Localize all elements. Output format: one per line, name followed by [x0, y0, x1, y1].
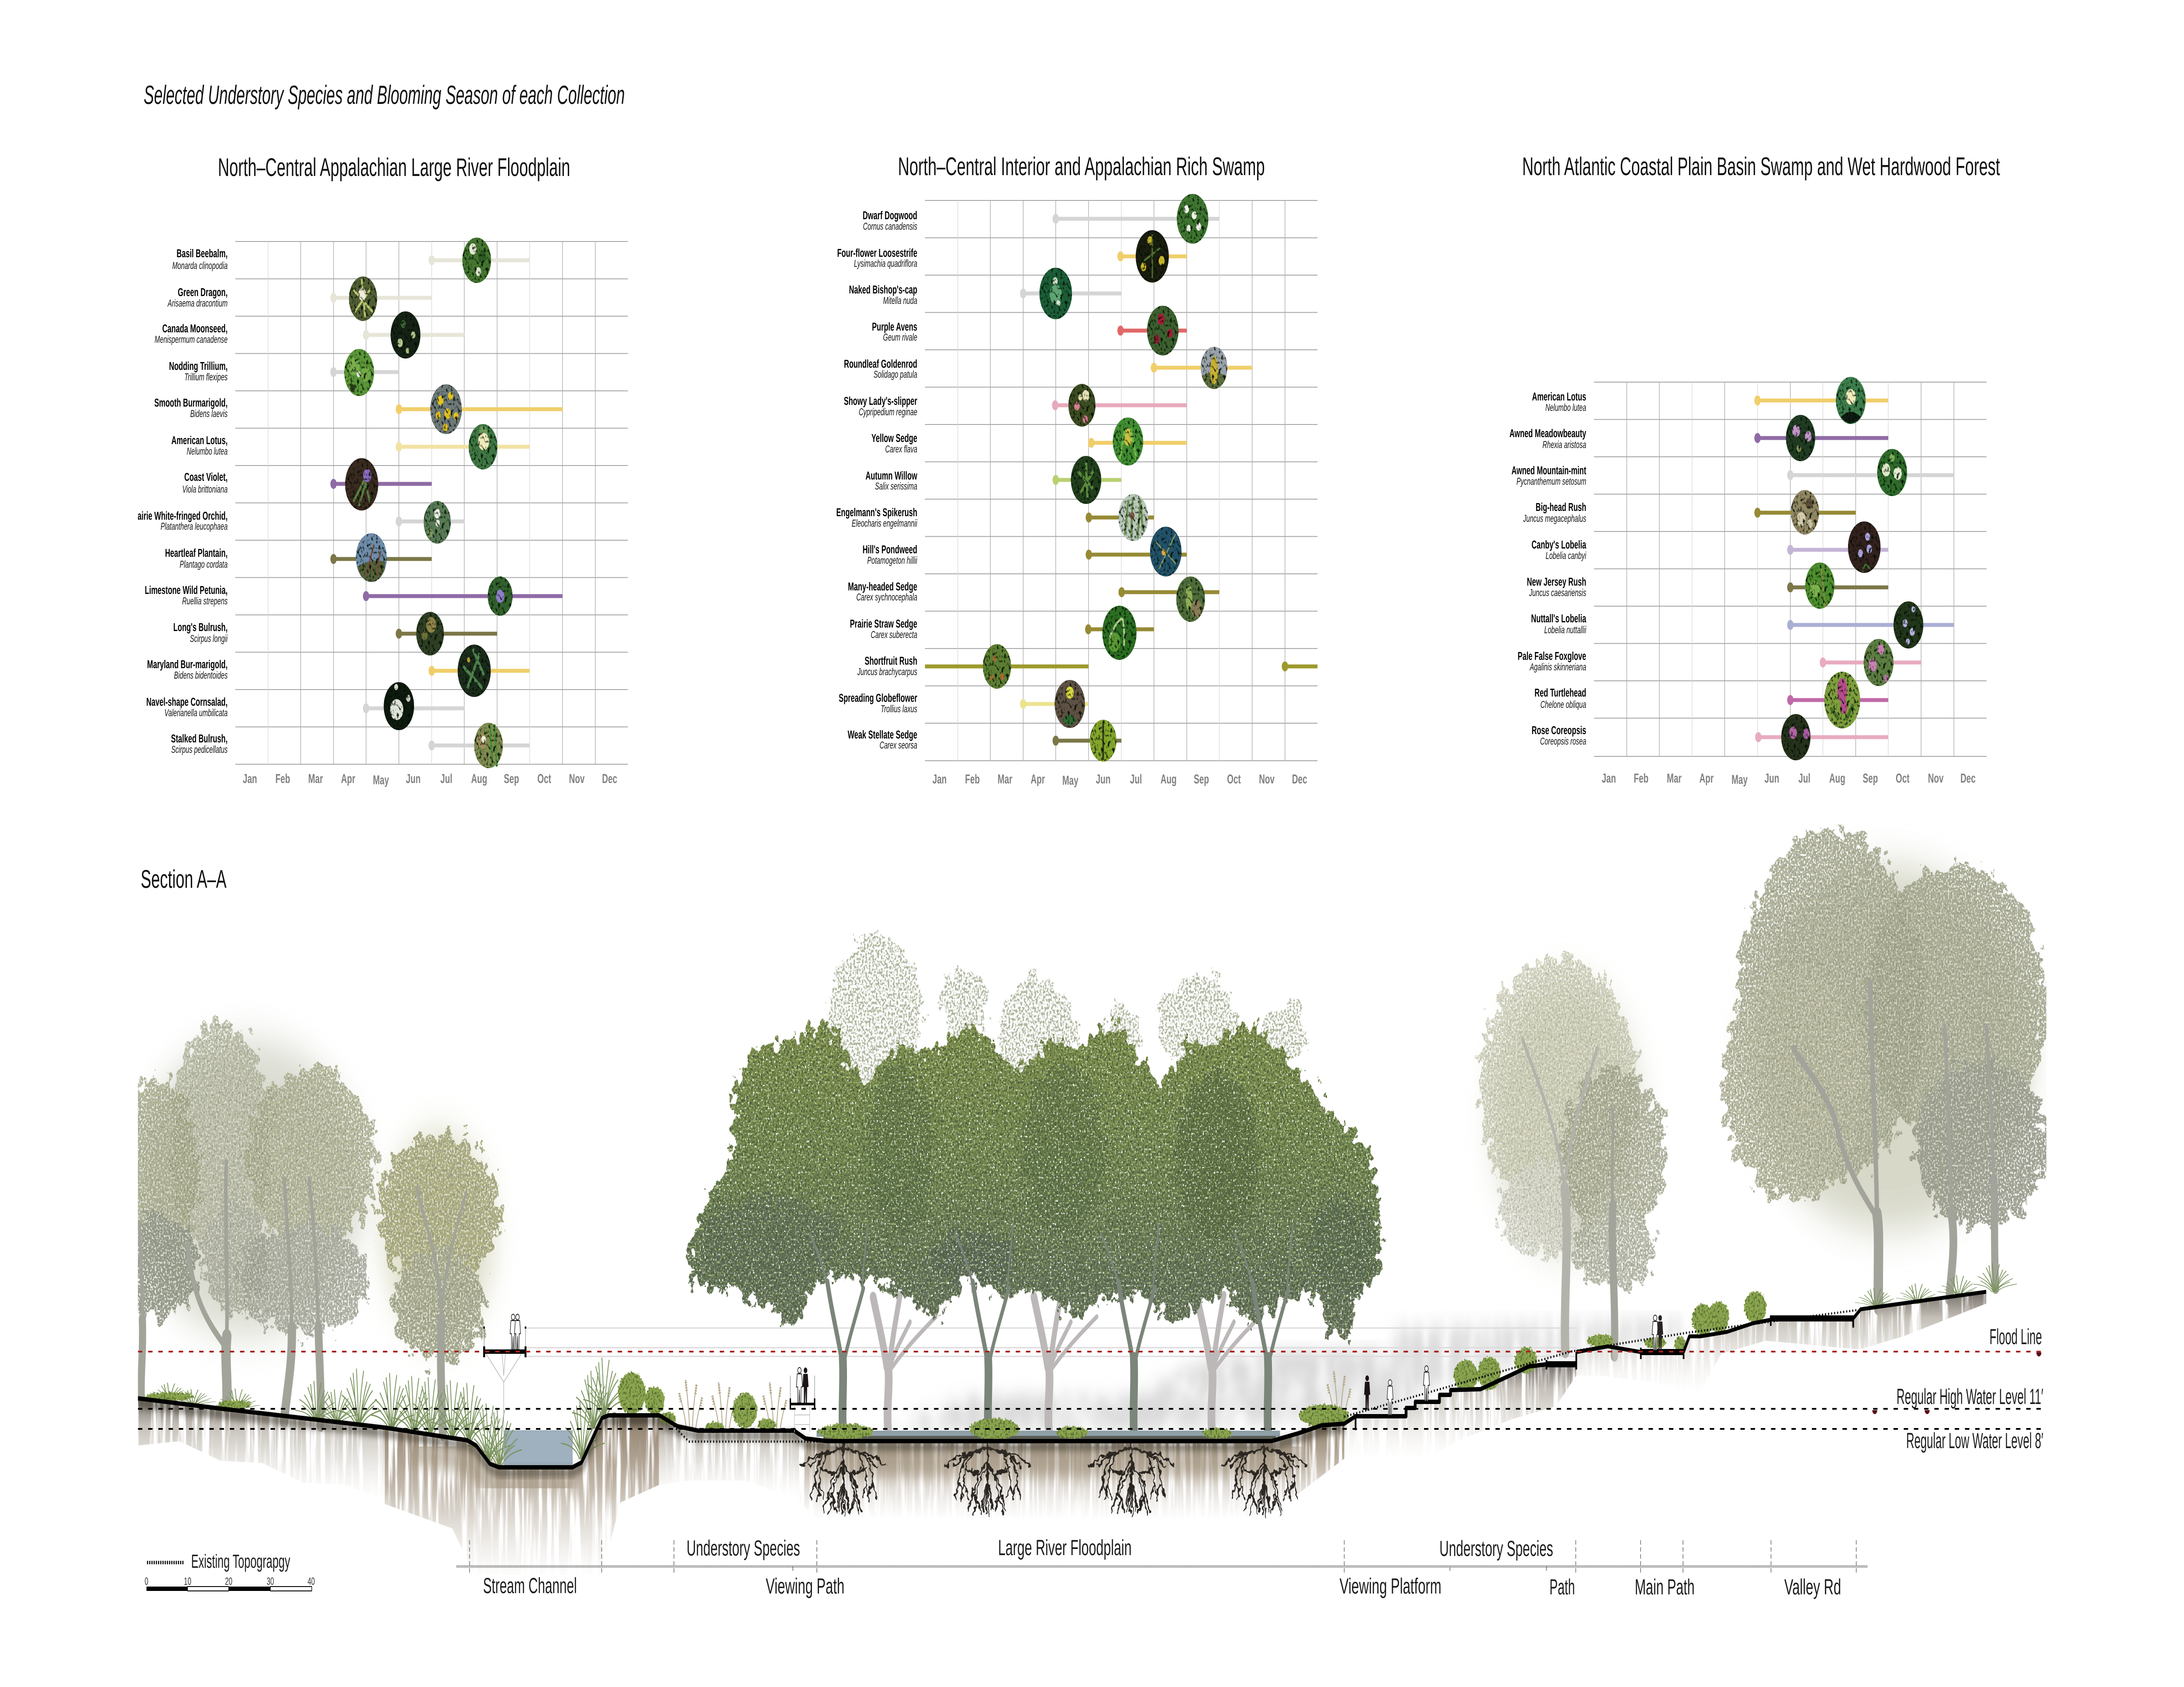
row: Purple Avens: Purple Avens: [872, 320, 917, 333]
row: Big-head Rush: Big-head Rush: [1536, 500, 1586, 514]
trees: soft fog mass behind groves: [132, 865, 2033, 1341]
flood line: [138, 1351, 2043, 1352]
month axis: Mar: [308, 772, 323, 786]
month axis: Mar: [998, 772, 1013, 787]
month axis: Aug: [1161, 772, 1177, 787]
month axis: Nov: [569, 772, 584, 786]
zone labels: Stream Channel: [483, 1573, 577, 1598]
row: Navel-shape Cornsalad: Valerianella umbilicata: [164, 708, 228, 719]
row: Showy Lady's-slipper: Showy Lady's-slipper: [844, 394, 917, 407]
shrubs: [145, 1291, 1766, 1439]
scale bar: 10: [184, 1576, 191, 1587]
water level labels: Regular Low Water Level 8′: [1906, 1428, 2043, 1453]
row: Four-flower Loosestrife: [837, 230, 1187, 283]
row: New Jersey Rush: Juncus caesariensis: [1529, 588, 1586, 599]
month axis: Oct: [1896, 771, 1910, 786]
row: Nuttall's Lobelia: [1531, 601, 1954, 649]
month axis: Aug: [1829, 771, 1845, 786]
month axis: Feb: [965, 772, 980, 787]
row: Weak Stellate Sedge: Weak Stellate Sedge: [848, 728, 917, 741]
row: Green Dragon: Green Dragon,: [178, 286, 228, 299]
trees: ghost background canopy: [828, 936, 1305, 1102]
month axis: May: [1731, 773, 1748, 787]
month axis: Apr: [1031, 772, 1045, 787]
row: American Lotus: Nelumbo lutea: [1545, 403, 1586, 414]
month axis: Jul: [1798, 771, 1811, 786]
month axis: Feb: [1634, 771, 1648, 786]
row: Limestone Wild Petunia: Ruellia strepens: [182, 596, 228, 607]
month axis: Dec: [1960, 771, 1976, 786]
row: American Lotus: American Lotus,: [171, 434, 228, 447]
row: Stalked Bulrush: [171, 723, 530, 768]
month axis: [243, 772, 617, 787]
row: Dwarf Dogwood: [863, 194, 1219, 244]
month axis: Dec: [602, 772, 617, 786]
zone labels: Viewing Platform: [1340, 1574, 1441, 1598]
main heading: Selected Understory Species and Blooming Season of each Collection: [144, 80, 625, 110]
row: Dwarf Dogwood: Dwarf Dogwood: [863, 209, 917, 222]
row: Hill's Pondweed: [863, 527, 1187, 576]
row: Autumn Willow: Autumn Willow: [866, 469, 917, 482]
row: Prairie Straw Sedge: [850, 606, 1154, 660]
row: Nodding Trillium: [169, 349, 399, 396]
row: Heartleaf Plantain: Plantago cordata: [180, 559, 228, 570]
row: Basil Beebalm: [172, 238, 530, 283]
row: Awned Meadowbeauty: Awned Meadowbeauty: [1510, 427, 1586, 440]
month axis: Jul: [1130, 772, 1142, 787]
soil: continuous top band below the floodplain and channel: [414, 1450, 1302, 1485]
month axis: [933, 772, 1307, 788]
row: Maryland Bur-marigold: Maryland Bur-marigold,: [147, 658, 228, 671]
panel: North-Central Interior and Appalachian Rich Swamp: [836, 153, 1317, 788]
month axis: Sep: [504, 772, 519, 786]
row: Nuttall's Lobelia: Lobelia nuttallii: [1544, 625, 1586, 636]
month axis: Oct: [537, 772, 551, 786]
month axis: Jan: [243, 772, 257, 786]
trees: foggy right-hand groves: [1480, 830, 2047, 1356]
row: Prairie Straw Sedge: Prairie Straw Sedge: [850, 617, 917, 630]
row: Prairie Straw Sedge: Carex suberecta: [871, 630, 917, 641]
row: Stalked Bulrush: Stalked Bulrush,: [171, 732, 228, 745]
row: Hill's Pondweed: Hill's Pondweed: [863, 543, 917, 556]
row: Spreading Globeflower: Spreading Globeflower: [839, 691, 917, 704]
row: Red Turtlehead: Chelone obliqua: [1541, 700, 1586, 711]
regular high water line: [138, 1408, 2043, 1410]
row: American Lotus: [1532, 377, 1888, 424]
row: Prairie White-fringed Orchid: Prairie White-fringed Orchid,: [130, 509, 228, 522]
tree roots: [801, 1443, 1307, 1517]
month axis: Jun: [1765, 771, 1779, 786]
water level labels: [1897, 1325, 2043, 1453]
row: Rose Coreopsis: Coreopsis rosea: [1540, 736, 1586, 747]
month axis: Aug: [471, 772, 487, 786]
month axis: Jun: [1096, 772, 1110, 787]
month axis: Sep: [1194, 772, 1209, 787]
row: Green Dragon: Arisaema dracontium: [167, 298, 228, 309]
row: Canby's Lobelia: Lobelia canbyi: [1546, 551, 1586, 562]
row: Coast Violet: [182, 458, 432, 511]
row: American Lotus: Nelumbo lutea: [187, 446, 228, 457]
row: Rose Coreopsis: Rose Coreopsis: [1531, 724, 1586, 737]
water: floodplain pool: [816, 1431, 1280, 1441]
water: stream channel: [504, 1430, 573, 1467]
month axis: Nov: [1259, 772, 1275, 787]
zone labels: Path: [1549, 1575, 1575, 1599]
month axis: Jul: [440, 772, 453, 786]
row: Showy Lady's-slipper: [844, 384, 1187, 427]
row: Showy Lady's-slipper: Cypripedium reginae: [859, 407, 917, 418]
row: Roundleaf Goldenrod: Solidago patula: [874, 369, 917, 380]
row: Coast Violet: Coast Violet,: [184, 470, 228, 483]
zone labels: Understory Species: [1439, 1536, 1553, 1561]
row: American Lotus: [171, 424, 530, 469]
row: Four-flower Loosestrife: Lysimachia quadriflora: [854, 259, 917, 269]
row: Red Turtlehead: [1534, 672, 1888, 728]
month axis: [1602, 771, 1976, 787]
section heading: Section A–A: [141, 866, 227, 894]
row: Canada Moonseed: Canada Moonseed,: [162, 322, 228, 335]
row: New Jersey Rush: [1527, 562, 1888, 609]
row: Prairie White-fringed Orchid: [130, 501, 464, 544]
section drawing A-A: [111, 830, 2047, 1575]
row: Canada Moonseed: Menispermum canadense: [155, 335, 228, 345]
scale bar: [145, 1576, 315, 1591]
water level labels: Regular High Water Level 11′: [1897, 1384, 2043, 1409]
zone labels: [483, 1535, 1841, 1599]
scale bar: 30: [266, 1576, 274, 1587]
month axis: Nov: [1928, 771, 1944, 786]
row: Basil Beebalm: Basil Beebalm,: [176, 247, 228, 260]
row: American Lotus: American Lotus: [1532, 390, 1586, 403]
regular low water line: [138, 1428, 2043, 1430]
bridge over stream channel: [483, 1326, 526, 1465]
zone labels: Valley Rd: [1784, 1575, 1841, 1599]
chart heading: North Atlantic Coastal Plain Basin Swamp and Wet Hardwood Forest: [1522, 153, 2000, 181]
row: Awned Mountain-mint: Pycnanthemum setosum: [1517, 476, 1586, 487]
row: Many-headed Sedge: [848, 576, 1219, 622]
month axis: Dec: [1292, 772, 1307, 787]
chart heading: North–Central Interior and Appalachian Rich Swamp: [898, 153, 1265, 181]
row: Maryland Bur-marigold: [147, 645, 530, 697]
row: Navel-shape Cornsalad: Navel-shape Cornsalad,: [146, 695, 228, 708]
row: New Jersey Rush: New Jersey Rush: [1527, 575, 1586, 588]
soil profile: [138, 1293, 1986, 1575]
grass along slope and stream banks: [149, 1263, 2017, 1465]
row: Smooth Burmarigold: [154, 384, 563, 434]
row: Nodding Trillium: Nodding Trillium,: [169, 359, 228, 373]
row: Purple Avens: Geum rivale: [883, 332, 917, 343]
row: Heartleaf Plantain: Heartleaf Plantain,: [165, 546, 228, 559]
row: Weak Stellate Sedge: [848, 720, 1121, 762]
row: Yellow Sedge: [871, 417, 1187, 466]
row: Yellow Sedge: Carex flava: [885, 444, 917, 455]
month axis: May: [373, 773, 389, 787]
scale bar: 20: [225, 1576, 232, 1587]
row: Naked Bishop's-cap: Mitella nuda: [883, 296, 917, 307]
row: Autumn Willow: Salix serissima: [875, 481, 917, 492]
month axis: Apr: [341, 772, 356, 786]
row: Autumn Willow: [866, 456, 1121, 504]
row: Heartleaf Plantain: [165, 533, 432, 582]
trees: main floodplain canopy: [690, 1022, 1382, 1344]
row: Dwarf Dogwood: Cornus canadensis: [863, 221, 917, 232]
month axis: Oct: [1227, 772, 1241, 787]
month axis: Jan: [933, 772, 947, 787]
panel: North-Central Appalachian Large River Floodplain: [130, 154, 628, 787]
row: Prairie White-fringed Orchid: Platanthera leucophaea: [161, 521, 228, 532]
row: Spreading Globeflower: Trollius laxus: [881, 704, 917, 715]
row: Nodding Trillium: Trillium flexipes: [184, 372, 228, 383]
row: Many-headed Sedge: Many-headed Sedge: [848, 580, 917, 593]
month axis: Jan: [1602, 771, 1616, 786]
row: Roundleaf Goldenrod: Roundleaf Goldenrod: [844, 357, 917, 370]
people: [510, 1314, 1663, 1415]
row: Naked Bishop's-cap: [849, 268, 1121, 319]
row: Big-head Rush: Juncus megacephalus: [1523, 514, 1586, 524]
existing topography dotted line: [666, 1310, 1857, 1442]
row: Awned Meadowbeauty: [1510, 415, 1888, 461]
row: Long's Bulrush: Scirpus longii: [190, 634, 228, 645]
row: Awned Mountain-mint: [1511, 449, 1954, 496]
zone labels: Main Path: [1635, 1575, 1695, 1599]
row: Shortfruit Rush: Shortfruit Rush: [865, 654, 917, 667]
row: Engelmann's Spikerush: Eleocharis engelmannii: [852, 518, 917, 529]
row: Navel-shape Cornsalad: [146, 682, 464, 730]
row: Pale False Foxglove: Pale False Foxglove: [1518, 649, 1586, 662]
row: Engelmann's Spikerush: Engelmann's Spikerush: [836, 506, 917, 519]
row: Long's Bulrush: [173, 612, 497, 655]
month axis: Jun: [406, 772, 421, 786]
row: Canada Moonseed: [155, 311, 464, 359]
row: Big-head Rush: [1523, 490, 1856, 535]
row: Roundleaf Goldenrod: [844, 347, 1252, 389]
row: Coast Violet: Viola brittoniana: [182, 484, 228, 495]
month axis: Apr: [1699, 771, 1714, 786]
row: Naked Bishop's-cap: Naked Bishop's-cap: [849, 283, 917, 296]
row: Awned Mountain-mint: Awned Mountain-mint: [1511, 464, 1586, 477]
row: Limestone Wild Petunia: [145, 576, 563, 616]
month axis: May: [1062, 773, 1078, 788]
row: Spreading Globeflower: [839, 680, 1089, 728]
zone labels: Large River Floodplain: [998, 1535, 1132, 1560]
row: Red Turtlehead: Red Turtlehead: [1534, 686, 1586, 699]
row: Limestone Wild Petunia: Limestone Wild Petunia,: [145, 583, 228, 597]
row: Basil Beebalm: Monarda clinopodia: [172, 261, 228, 272]
row: Nuttall's Lobelia: Nuttall's Lobelia: [1531, 612, 1586, 625]
row: Shortfruit Rush: Juncus brachycarpus: [857, 667, 917, 678]
row: Awned Meadowbeauty: Rhexia aristosa: [1542, 440, 1586, 451]
legend: existing topography: Existing Topograpgy: [191, 1551, 290, 1572]
reeds: [679, 1371, 1350, 1431]
background mist: [886, 1319, 1683, 1431]
row: Maryland Bur-marigold: Bidens bidentoides: [174, 670, 228, 681]
row: Purple Avens: [872, 306, 1187, 355]
row: Pale False Foxglove: Agalinis skinneriana: [1530, 662, 1586, 673]
row: Four-flower Loosestrife: Four-flower Loosestrife: [837, 246, 917, 259]
trees: dark front trunks: [810, 1225, 1292, 1430]
scale bar: 0: [145, 1576, 149, 1587]
row: Shortfruit Rush: [857, 644, 1317, 689]
row: Rose Coreopsis: [1531, 714, 1888, 760]
water level labels: Flood Line: [1990, 1325, 2042, 1349]
chart heading: North–Central Appalachian Large River Floodplain: [218, 154, 570, 182]
row: Weak Stellate Sedge: Carex seorsa: [880, 740, 917, 751]
row: Long's Bulrush: Long's Bulrush,: [173, 621, 228, 634]
small maroon level markers: [1872, 1352, 2041, 1414]
row: Green Dragon: [167, 276, 432, 321]
row: Many-headed Sedge: Carex sychnocephala: [856, 592, 917, 603]
row: Pale False Foxglove: [1518, 639, 1921, 686]
row: Canby's Lobelia: Canby's Lobelia: [1531, 538, 1586, 551]
scale bar: 40: [308, 1576, 315, 1587]
month axis: Sep: [1863, 771, 1878, 786]
viewing path deck: [790, 1376, 815, 1432]
zone labels: Viewing Path: [766, 1574, 844, 1598]
ground section line: [138, 1292, 1986, 1473]
zone labels: Understory Species: [687, 1536, 800, 1560]
zone axis with tick marks: [456, 1540, 1867, 1573]
row: Smooth Burmarigold: Smooth Burmarigold,: [154, 396, 228, 409]
panel: North Atlantic Coastal Plain Basin Swamp and Wet Hardwood Forest: [1510, 153, 2000, 787]
row: Stalked Bulrush: Scirpus pedicellatus: [171, 745, 228, 756]
row: Hill's Pondweed: Potamogeton hillii: [867, 555, 917, 566]
row: Engelmann's Spikerush: [836, 494, 1154, 541]
row: Canby's Lobelia: [1531, 521, 1888, 573]
month axis: Feb: [276, 772, 290, 786]
row: Yellow Sedge: Yellow Sedge: [871, 431, 917, 445]
trees: pale rear trunks: [873, 1295, 1260, 1430]
trees: foggy left grove: [111, 1023, 500, 1435]
month axis: Mar: [1667, 771, 1682, 786]
row: Smooth Burmarigold: Bidens laevis: [190, 409, 228, 420]
